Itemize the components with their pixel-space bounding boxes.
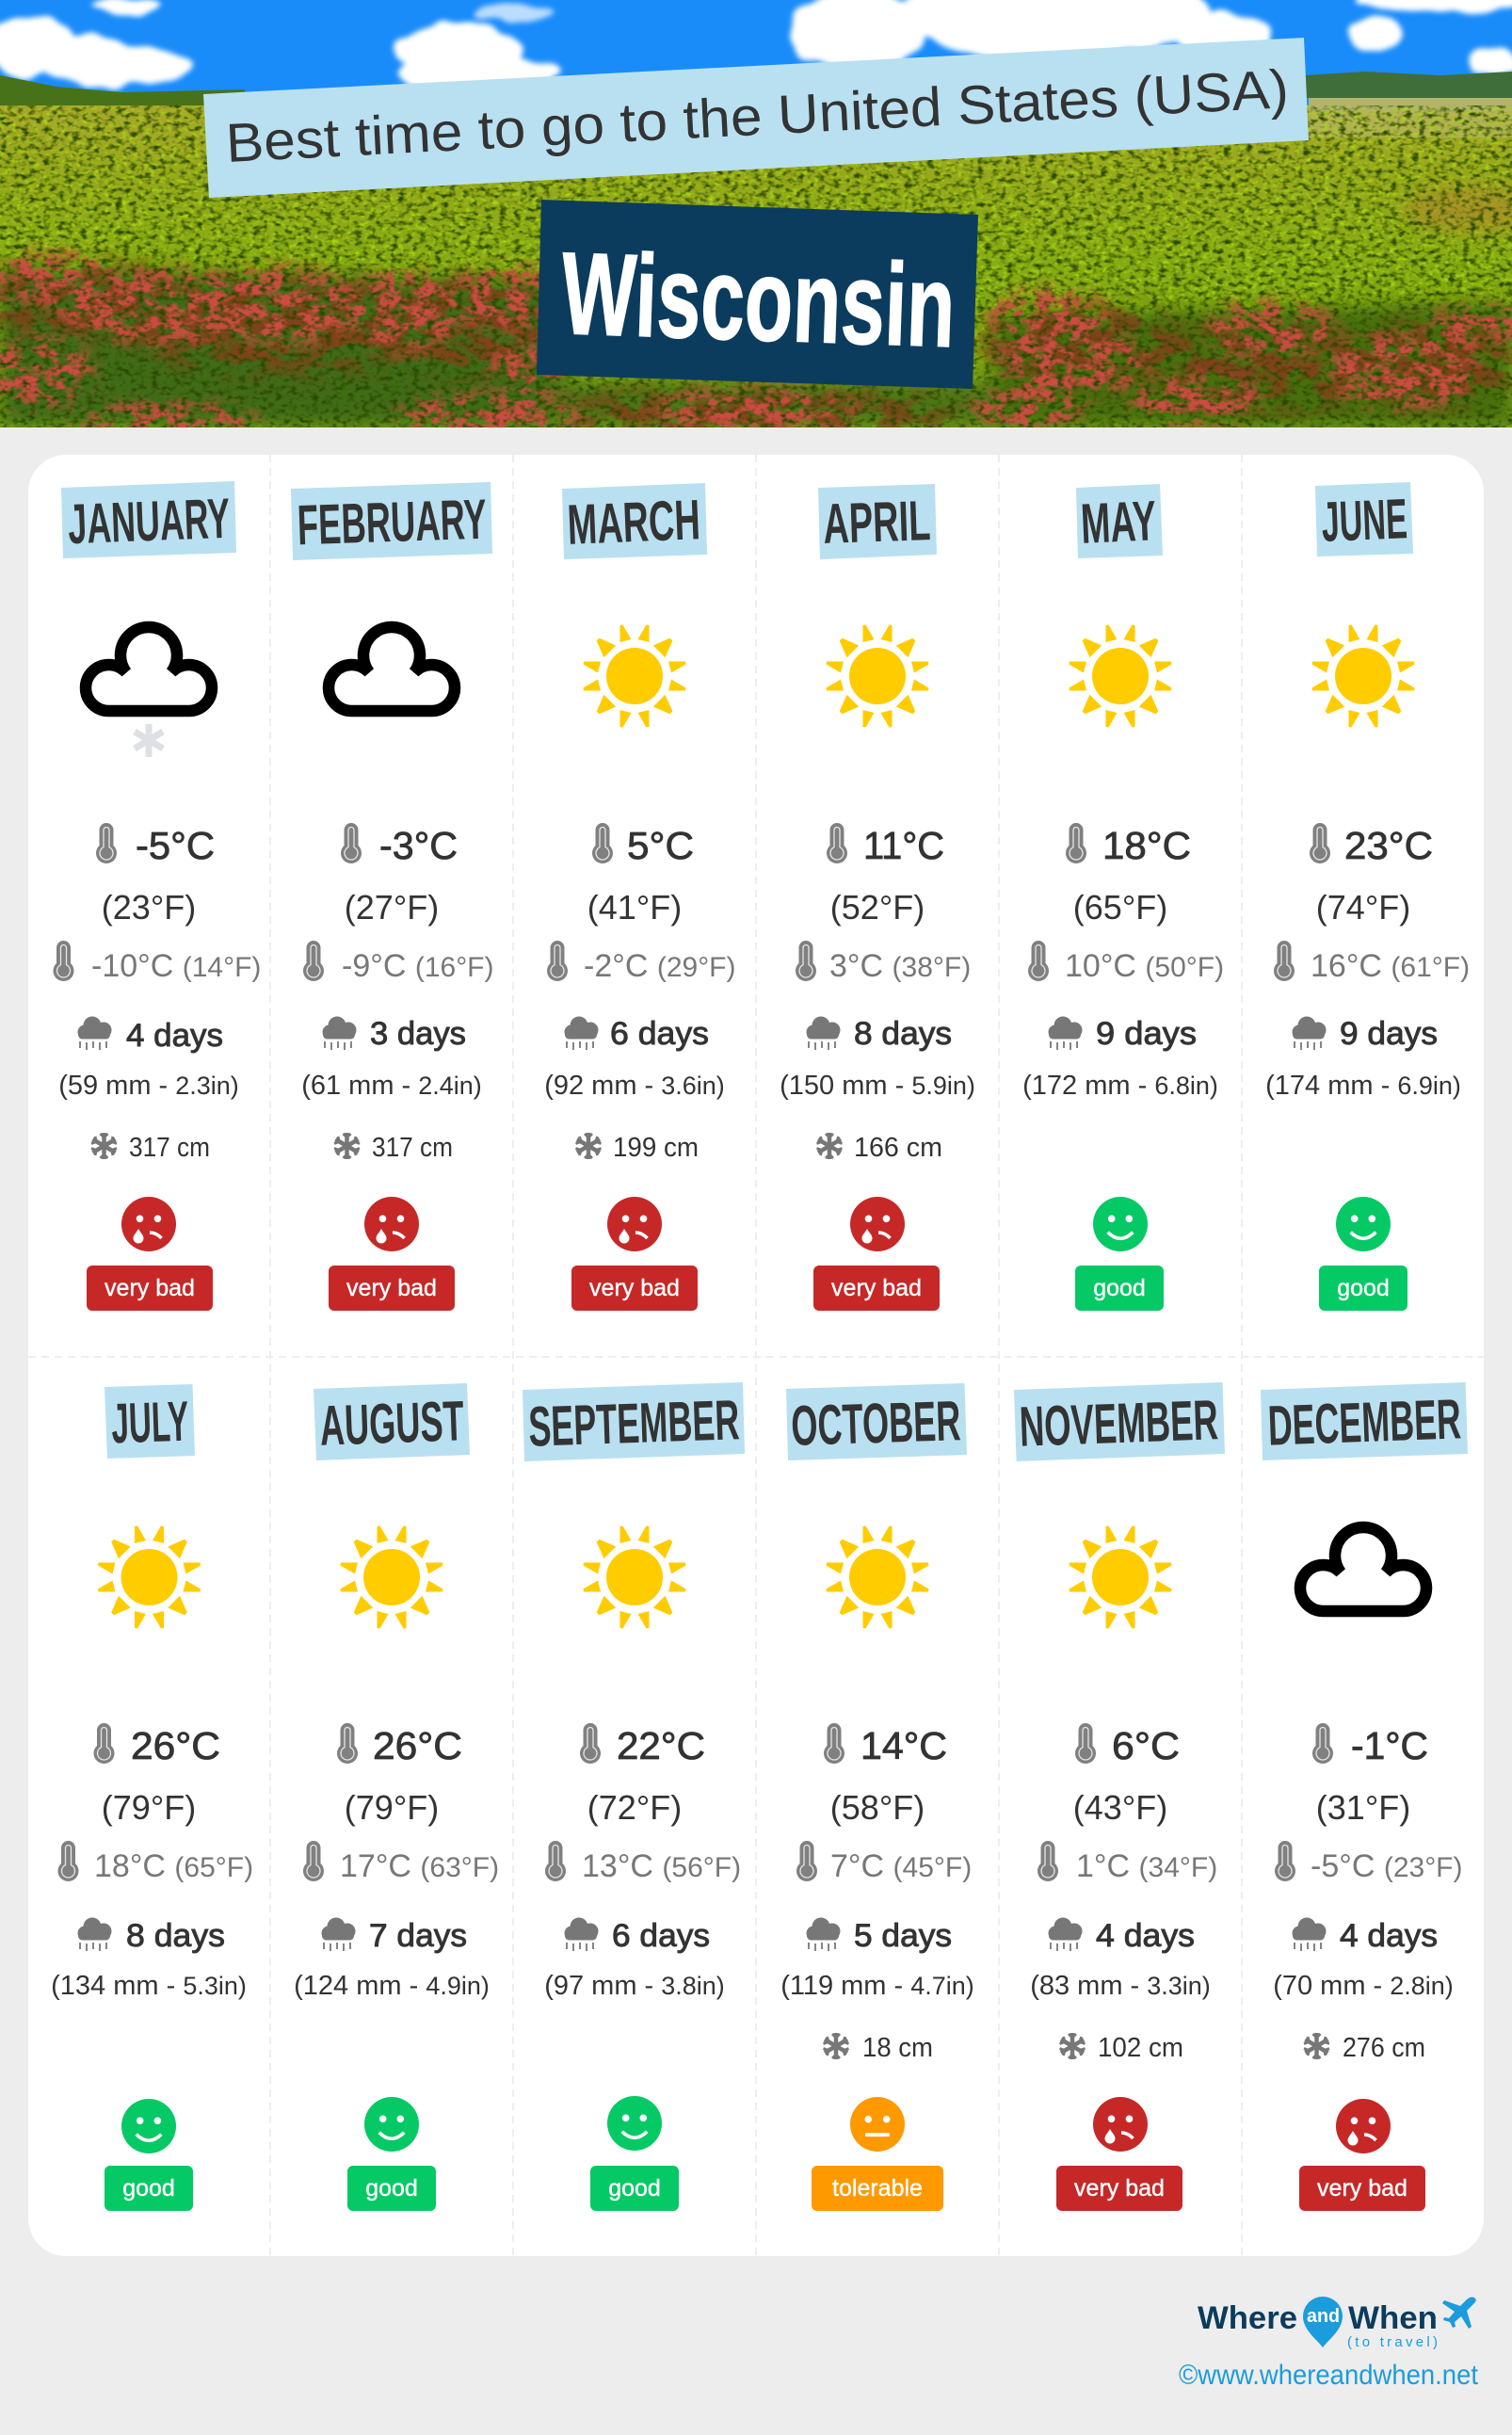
- column: September: [523, 1382, 745, 2211]
- rating face: good: [364, 2097, 419, 2152]
- icon: sun: [584, 1525, 685, 1629]
- icon: low thermometer: [303, 941, 324, 981]
- column: March: [544, 483, 736, 1311]
- high temperature in Fahrenheit: (31°F): [1316, 1788, 1410, 1827]
- average high temperature: 18°C: [1102, 824, 1191, 867]
- high temperature in Fahrenheit: (65°F): [1073, 888, 1167, 927]
- rating badge: very bad: very bad: [105, 1275, 195, 1301]
- icon: sun: [1070, 625, 1171, 727]
- rainy days: 4 days: [1096, 1918, 1195, 1954]
- high temperature in Fahrenheit: (79°F): [102, 1788, 196, 1827]
- rating face: very bad: [1093, 2097, 1148, 2152]
- high temperature in Fahrenheit: (23°F): [102, 888, 196, 927]
- month label: February: [291, 482, 492, 560]
- month label: May: MAY: [1080, 489, 1158, 556]
- rainy days: 6 days: [612, 1918, 710, 1954]
- rainfall amount: (174 mm - 6.9in): [1265, 1071, 1461, 1101]
- rating badge: very bad: very bad: [1317, 2175, 1407, 2201]
- rating badge: very bad: [1056, 2166, 1182, 2211]
- icon: rain cloud: [1292, 1917, 1326, 1951]
- icon: thermometer: [1310, 823, 1330, 863]
- column: February: [291, 482, 493, 1311]
- rating badge: good: [1319, 1266, 1407, 1311]
- snowfall amount: 317 cm: [129, 1133, 210, 1163]
- high temperature in Fahrenheit: (58°F): [830, 1788, 925, 1827]
- icon: low thermometer: [1028, 941, 1049, 981]
- rating badge: very bad: very bad: [1074, 2175, 1165, 2201]
- rating face: very bad: [121, 1197, 176, 1251]
- icon: snowflake: [91, 1133, 117, 1159]
- icon: snowflake: [1304, 2033, 1329, 2059]
- icon: sun: [98, 1525, 201, 1629]
- column: November: [1014, 1382, 1225, 2211]
- rainfall amount: (150 mm - 5.9in): [780, 1071, 975, 1101]
- month label: October: OCTOBER: [790, 1389, 961, 1458]
- average high temperature: 22°C: [617, 1724, 705, 1767]
- rating badge: very bad: [1299, 2166, 1425, 2211]
- rainfall amount: (172 mm - 6.8in): [1022, 1071, 1218, 1101]
- average low temperature: 13°C (56°F): [582, 1848, 741, 1884]
- rating face: tolerable: [850, 2097, 905, 2152]
- month label: September: [523, 1382, 745, 1461]
- icon: sun: [1312, 625, 1414, 727]
- logo: Where and When: When: [1348, 2300, 1438, 2336]
- icon: airplane: [1442, 2298, 1476, 2329]
- icon: cloud with snow: [86, 627, 212, 757]
- rainfall amount: (59 mm - 2.3in): [58, 1071, 239, 1101]
- rating badge: good: good: [608, 2175, 661, 2201]
- high temperature in Fahrenheit: (72°F): [587, 1788, 682, 1827]
- icon: rain cloud: [77, 1917, 111, 1951]
- average high temperature: 11°C: [863, 824, 944, 867]
- month label: August: AUGUST: [319, 1389, 465, 1458]
- rainy days: 6 days: [610, 1016, 709, 1052]
- average high temperature: -3°C: [379, 824, 458, 867]
- icon: rain cloud: [565, 1917, 599, 1951]
- icon: thermometer: [827, 823, 847, 863]
- snowfall amount: 276 cm: [1343, 2033, 1425, 2063]
- rating badge: good: good: [122, 2175, 175, 2201]
- logo: Where and When: Where: [1198, 2300, 1297, 2336]
- rating badge: good: [1075, 1266, 1164, 1311]
- icon: low thermometer: [545, 1841, 566, 1881]
- high temperature in Fahrenheit: (74°F): [1316, 888, 1410, 927]
- average high temperature: 26°C: [373, 1724, 462, 1767]
- rating face: good: [1336, 1197, 1391, 1251]
- icon: snowflake: [817, 1133, 842, 1159]
- rating badge: very bad: [813, 1266, 940, 1311]
- average low temperature: 7°C (45°F): [830, 1848, 972, 1884]
- average low temperature: 16°C (61°F): [1311, 948, 1470, 984]
- snowfall amount: 317 cm: [372, 1133, 453, 1163]
- month label: March: MARCH: [566, 488, 701, 556]
- rainy days: 5 days: [854, 1918, 952, 1954]
- icon: thermometer: [580, 1723, 601, 1764]
- rating badge: tolerable: [812, 2166, 943, 2211]
- icon: thermometer: [824, 1723, 844, 1764]
- average high temperature: -1°C: [1351, 1724, 1428, 1767]
- icon: sun: [341, 1525, 442, 1629]
- logo: Where and When: (to travel): [1347, 2334, 1438, 2350]
- average high temperature: 6°C: [1112, 1724, 1180, 1767]
- snowfall amount: 166 cm: [854, 1133, 942, 1163]
- rainfall amount: (70 mm - 2.8in): [1273, 1971, 1454, 2001]
- month label: May: [1076, 484, 1163, 558]
- month label: August: [314, 1383, 470, 1460]
- average high temperature: 5°C: [627, 824, 694, 867]
- icon: low thermometer: [1275, 1841, 1295, 1881]
- rainy days: 4 days: [126, 1018, 223, 1054]
- icon: rain cloud: [1049, 1917, 1083, 1951]
- month label: June: JUNE: [1320, 487, 1408, 554]
- average low temperature: 1°C (34°F): [1076, 1848, 1217, 1884]
- icon: sun: [584, 625, 685, 727]
- rainfall amount: (119 mm - 4.7in): [780, 1971, 974, 2001]
- icon: rain cloud: [565, 1017, 599, 1050]
- icon: thermometer: [341, 823, 362, 863]
- column: January: [53, 481, 261, 1311]
- icon: map pin: and: [1307, 2306, 1340, 2327]
- column: December: [1261, 1382, 1468, 2211]
- average high temperature: 26°C: [131, 1724, 220, 1767]
- rainfall amount: (83 mm - 3.3in): [1030, 1971, 1211, 2001]
- logo: Where and When: [1198, 2297, 1476, 2350]
- icon: map pin: [1303, 2297, 1343, 2347]
- icon: low thermometer: [303, 1841, 324, 1881]
- icon: low thermometer: [796, 941, 816, 981]
- column: April: [780, 484, 975, 1311]
- month label: June: [1315, 482, 1413, 556]
- title banner: [203, 38, 1309, 198]
- rating badge: good: good: [1337, 1275, 1390, 1301]
- average low temperature: 10°C (50°F): [1065, 948, 1224, 984]
- icon: thermometer: [1312, 1723, 1333, 1764]
- icon: low thermometer: [53, 941, 73, 981]
- icon: snowflake: [576, 1133, 601, 1159]
- average high temperature: 23°C: [1344, 824, 1433, 867]
- rainfall amount: (92 mm - 3.6in): [544, 1071, 725, 1101]
- average low temperature: -2°C (29°F): [584, 948, 736, 984]
- rating face: very bad: [607, 1197, 662, 1251]
- icon: rain cloud: [322, 1017, 356, 1050]
- rating face: very bad: [850, 1197, 905, 1251]
- rainfall amount: (124 mm - 4.9in): [294, 1971, 490, 2001]
- month label: November: [1014, 1382, 1225, 1461]
- icon: snowflake: [334, 1133, 360, 1159]
- rating badge: good: [590, 2166, 679, 2211]
- high temperature in Fahrenheit: (79°F): [345, 1788, 439, 1827]
- average low temperature: 3°C (38°F): [829, 948, 971, 984]
- icon: low thermometer: [547, 941, 568, 981]
- title banner: Best time to go to the United States (USA): [224, 58, 1290, 174]
- icon: rain cloud: [806, 1017, 840, 1050]
- icon: snowflake: [823, 2033, 849, 2059]
- snowfall amount: 199 cm: [613, 1133, 699, 1163]
- month label: April: APRIL: [822, 489, 931, 556]
- rating badge: good: [347, 2166, 436, 2211]
- month label: July: [105, 1384, 195, 1459]
- rating face: very bad: [1336, 2099, 1391, 2153]
- icon: low thermometer: [1037, 1841, 1058, 1881]
- icon: thermometer: [96, 823, 117, 863]
- icon: thermometer: [94, 1723, 115, 1764]
- icon: thermometer: [592, 823, 613, 863]
- month label: April: [818, 484, 937, 559]
- rainy days: 3 days: [370, 1016, 466, 1052]
- month label: March: [562, 483, 707, 559]
- rainy days: 7 days: [369, 1918, 467, 1954]
- rating badge: good: good: [1093, 1275, 1146, 1301]
- rainy days: 8 days: [126, 1918, 225, 1954]
- icon: thermometer: [337, 1723, 358, 1764]
- rating badge: very bad: [329, 1266, 455, 1311]
- rating face: good: [607, 2096, 662, 2151]
- icon: cloud: [1300, 1527, 1426, 1611]
- average low temperature: 17°C (63°F): [340, 1848, 499, 1884]
- average high temperature: -5°C: [136, 824, 215, 867]
- month label: January: JANUARY: [67, 487, 231, 556]
- icon: low thermometer: [1274, 941, 1295, 981]
- website credit: ©www.whereandwhen.net: [1179, 2360, 1479, 2391]
- high temperature in Fahrenheit: (41°F): [587, 888, 682, 927]
- icon: rain cloud: [806, 1917, 840, 1951]
- snowfall amount: 102 cm: [1098, 2033, 1183, 2063]
- icon: rain cloud: [322, 1917, 356, 1951]
- rainy days: 4 days: [1340, 1918, 1438, 1954]
- white calendar card: [28, 455, 1484, 2256]
- high temperature in Fahrenheit: (52°F): [830, 888, 925, 927]
- icon: sun: [827, 1525, 928, 1629]
- column: June: [1265, 482, 1470, 1311]
- icon: sun: [1070, 1525, 1171, 1629]
- rainy days: 8 days: [854, 1016, 952, 1052]
- rainfall amount: (134 mm - 5.3in): [51, 1971, 247, 2001]
- month label: September: SEPTEMBER: [527, 1388, 740, 1459]
- rating face: good: [1093, 1197, 1148, 1251]
- icon: sun: [827, 625, 928, 727]
- icon: rain cloud: [1049, 1017, 1083, 1050]
- rating face: good: [121, 2099, 176, 2153]
- rating badge: very bad: very bad: [589, 1275, 680, 1301]
- column: August: [294, 1383, 499, 2211]
- rainy days: 9 days: [1096, 1016, 1197, 1052]
- icon: low thermometer: [796, 1841, 817, 1881]
- column: October: [780, 1383, 974, 2211]
- rating badge: very bad: very bad: [346, 1275, 437, 1301]
- icon: cloud: [329, 627, 455, 711]
- month label: October: [786, 1383, 967, 1460]
- state name banner: Wisconsin: [559, 229, 957, 372]
- rating badge: good: [105, 2166, 193, 2211]
- average low temperature: -9°C (16°F): [342, 948, 493, 984]
- rating badge: tolerable: tolerable: [832, 2175, 923, 2201]
- icon: low thermometer: [58, 1841, 79, 1881]
- average low temperature: 18°C (65°F): [94, 1848, 253, 1884]
- high temperature in Fahrenheit: (27°F): [345, 888, 439, 927]
- rating badge: good: good: [365, 2175, 418, 2201]
- icon: rain cloud: [1292, 1017, 1326, 1050]
- rainfall amount: (97 mm - 3.8in): [544, 1971, 725, 2001]
- month label: January: [61, 481, 236, 558]
- high temperature in Fahrenheit: (43°F): [1073, 1788, 1167, 1827]
- rating badge: very bad: [87, 1266, 213, 1311]
- rainfall amount: (61 mm - 2.4in): [301, 1071, 482, 1101]
- rating badge: very bad: [571, 1266, 698, 1311]
- rating face: very bad: [364, 1197, 419, 1251]
- header landscape photo: [0, 0, 1512, 437]
- average low temperature: -5°C (23°F): [1311, 1848, 1463, 1884]
- average high temperature: 14°C: [861, 1724, 947, 1767]
- icon: thermometer: [1066, 823, 1086, 863]
- column: May: [1022, 484, 1224, 1311]
- snowfall amount: 18 cm: [862, 2033, 933, 2063]
- month label: February: FEBRUARY: [297, 488, 488, 556]
- column: July: [51, 1384, 253, 2211]
- icon: rain cloud: [77, 1017, 111, 1050]
- icon: thermometer: [1075, 1723, 1096, 1764]
- month label: November: NOVEMBER: [1019, 1388, 1219, 1459]
- average low temperature: -10°C (14°F): [91, 948, 261, 984]
- rating badge: very bad: very bad: [831, 1275, 922, 1301]
- icon: snowflake: [1060, 2033, 1085, 2059]
- month label: July: JULY: [110, 1390, 189, 1455]
- rainy days: 9 days: [1340, 1016, 1438, 1052]
- state name banner: [537, 200, 978, 389]
